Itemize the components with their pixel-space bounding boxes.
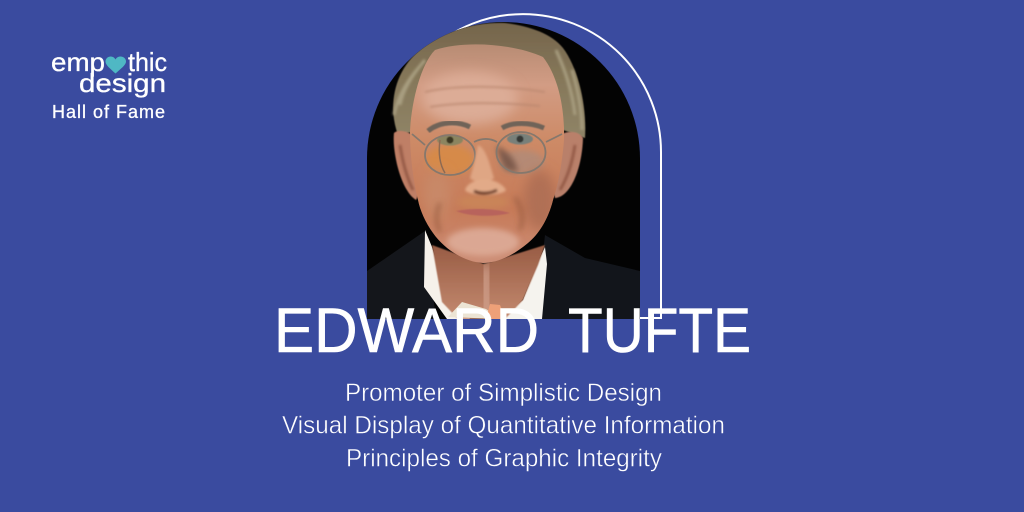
mouth [456,209,510,216]
eyebrows [428,123,544,131]
hair [393,23,585,138]
glasses [412,132,562,175]
icon: heart [106,56,126,74]
description [282,379,725,472]
eyes [437,134,533,146]
logo word: design: design [79,68,166,98]
description line 2: Visual Display of Quantitative Information [282,412,725,440]
ears [394,131,419,200]
title word: EDWARD: EDWARD [274,296,539,366]
portrait photo [367,14,640,319]
title word: TUFTE: TUFTE [568,296,751,366]
nose [465,145,506,195]
shadow beside nose [496,146,518,172]
description line 3: Principles of Graphic Integrity [346,444,662,472]
logo [51,47,167,122]
face [405,40,570,265]
description line 1: Promoter of Simplistic Design [345,379,662,407]
logo word: thic: thic [128,47,167,77]
arch outline [385,14,661,318]
logo word: emp: emp [51,47,105,77]
title [274,296,751,366]
logo subtitle: Hall of Fame [52,102,165,122]
